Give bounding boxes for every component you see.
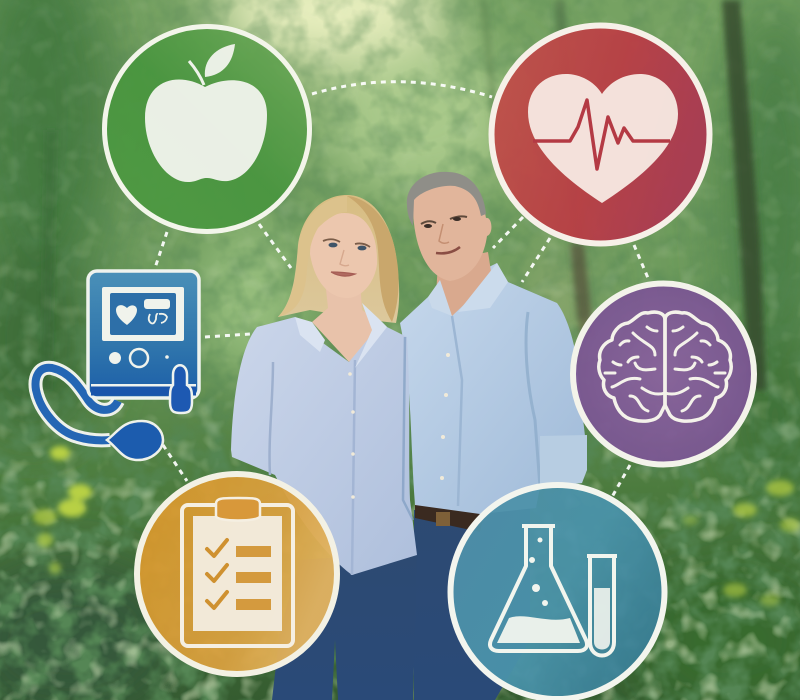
woman's face (310, 213, 377, 298)
checklist items (207, 540, 227, 608)
connector (170, 365, 192, 413)
cuff tube (36, 368, 118, 440)
right hemisphere (665, 312, 731, 421)
woman's jeans (272, 552, 417, 700)
clipboard clip (216, 498, 260, 520)
woman's shirt (231, 317, 417, 575)
couple (231, 172, 587, 700)
woman (231, 195, 417, 700)
man's jeans (414, 505, 530, 700)
flask (490, 526, 587, 651)
icon: lab flask and test tube in teal circle (450, 485, 664, 699)
monitor body (88, 271, 199, 398)
man's face (413, 183, 491, 281)
brain (599, 312, 731, 421)
man's neck (436, 252, 492, 316)
ECG line (533, 100, 670, 169)
woman's neck (312, 280, 383, 362)
icon: clipboard checklist in orange circle (137, 474, 337, 674)
hair back (278, 195, 399, 323)
man's belt (415, 504, 484, 532)
icon: blood pressure monitor (36, 271, 199, 460)
man's shirt (400, 263, 587, 514)
test tube (587, 556, 617, 656)
monitor screen (102, 287, 184, 341)
heart (528, 74, 678, 203)
monitor buttons (109, 352, 121, 364)
icon: brain in purple circle (573, 284, 754, 464)
dashed connector lines (155, 82, 648, 592)
apple body (145, 79, 267, 182)
apple stem (189, 61, 204, 85)
clipboard frame (182, 505, 293, 646)
man (400, 172, 587, 700)
icon: heart with ECG in red circle (492, 26, 710, 244)
bulb (107, 421, 163, 460)
left hemisphere (599, 312, 665, 421)
apple leaf (205, 44, 235, 77)
icon: apple in green circle (104, 26, 310, 232)
